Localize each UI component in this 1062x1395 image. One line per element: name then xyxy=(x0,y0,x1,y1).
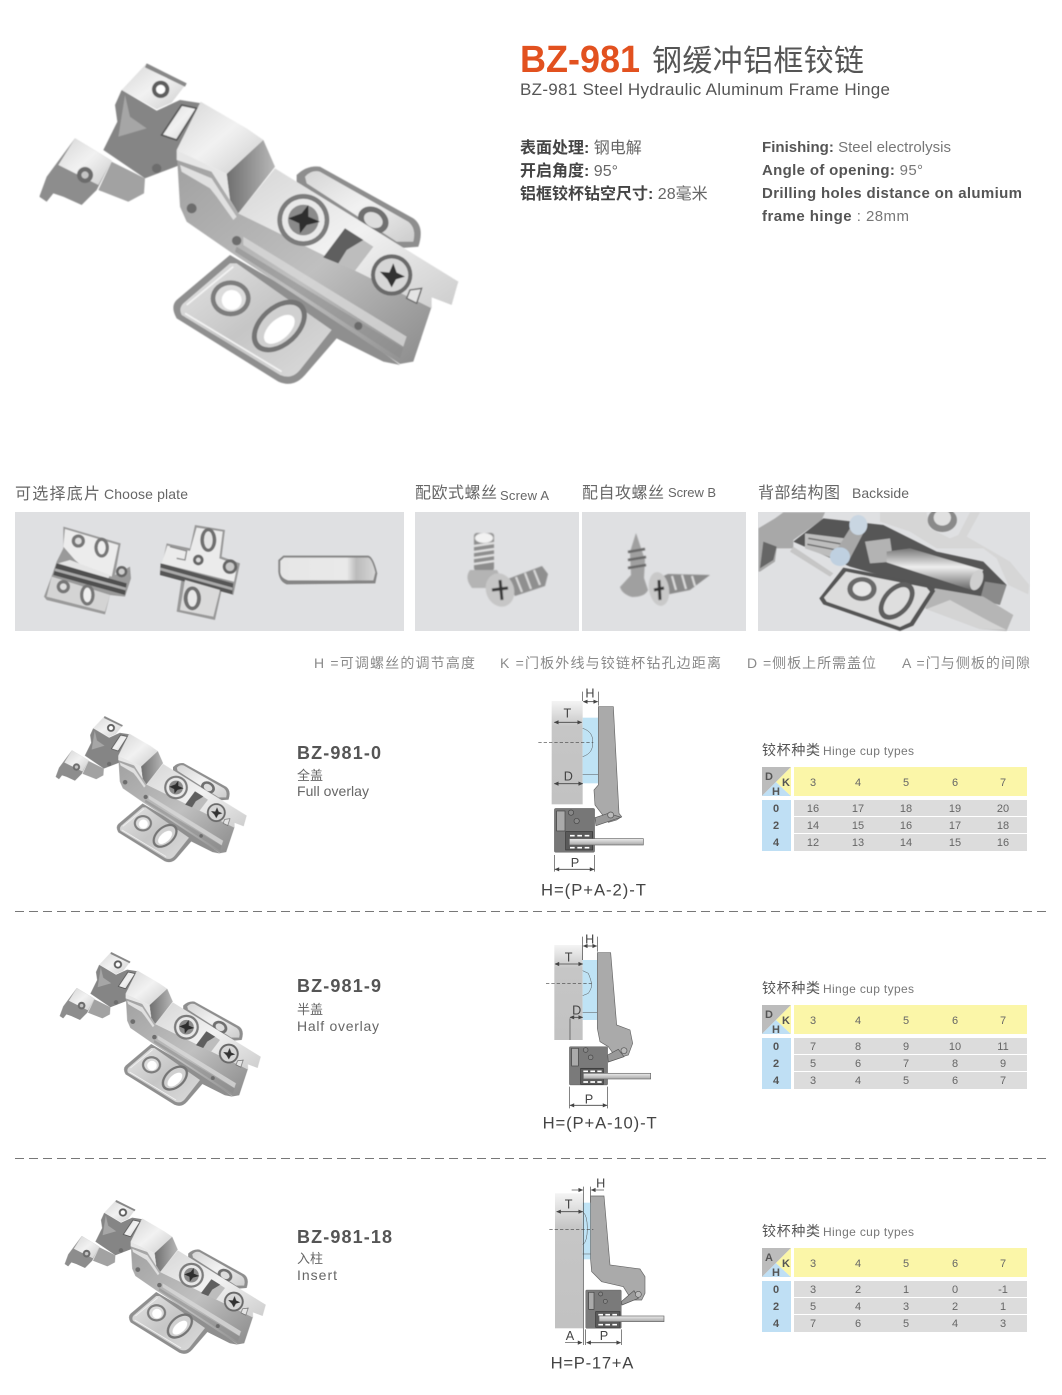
diagram: half overlay section: T xyxy=(565,950,573,964)
label: BZ-981-9: 半盖 xyxy=(297,1002,323,1017)
hinge cup table 0: 17 xyxy=(949,820,961,832)
hinge cup table 18: H xyxy=(772,1267,780,1279)
hinge cup table 9: 4 xyxy=(773,1075,780,1087)
hinge cup table 0: 14 xyxy=(807,820,819,832)
hinge cup table 9: 4 xyxy=(855,1075,861,1087)
diagram: half overlay section xyxy=(543,932,657,1133)
hinge cup table 0: Hinge cup types xyxy=(823,744,914,758)
hinge cup table 9: 6 xyxy=(952,1015,958,1027)
hinge cup table 0: 12 xyxy=(807,837,819,849)
dimension legend: A =门与侧板的间隙 xyxy=(902,655,1030,671)
hinge cup table 9: 5 xyxy=(810,1058,816,1070)
chinese specifications xyxy=(520,139,708,203)
hinge cup table 0: 3 xyxy=(810,777,816,789)
hinge cup table 0: 16 xyxy=(900,820,912,832)
row: BZ-981-9 xyxy=(60,932,1027,1133)
hinge cup table 9: 6 xyxy=(855,1058,861,1070)
diagram: half overlay section: D xyxy=(572,1003,581,1017)
hinge cup table 0: 7 xyxy=(1000,777,1006,789)
hinge cup table 18 xyxy=(762,1223,1027,1332)
hinge cup table 9: 9 xyxy=(1000,1058,1006,1070)
diagram: half overlay section: H xyxy=(585,932,594,946)
hinge cup table 18: 4 xyxy=(855,1301,861,1313)
hinge cup table 18: 1 xyxy=(1000,1301,1006,1313)
hinge cup table 0: 17 xyxy=(852,803,864,815)
diagram: full overlay section: P xyxy=(571,856,579,870)
section headings: Screw A xyxy=(500,488,549,503)
hinge cup table 18: 3 xyxy=(903,1301,909,1313)
english title: BZ-981 Steel Hydraulic Aluminum Frame Hinge xyxy=(520,80,890,99)
icon: cover cap xyxy=(278,556,377,584)
diagram: insert section: P xyxy=(600,1329,608,1343)
hinge cup table 9: 7 xyxy=(903,1058,909,1070)
hinge cup table 18: 6 xyxy=(855,1318,861,1330)
hinge cup table 0: 5 xyxy=(903,777,909,789)
hinge cup table 0: K xyxy=(782,777,790,789)
english specifications: frame hinge : 28mm xyxy=(762,208,909,225)
icon: hinge insert xyxy=(65,1200,266,1354)
dimension legend xyxy=(314,655,1030,671)
hinge cup table 18: 4 xyxy=(855,1258,861,1270)
hinge cup table 9: 10 xyxy=(949,1041,961,1053)
hinge cup table 18: 3 xyxy=(810,1284,816,1296)
hinge cup table 18: 7 xyxy=(810,1318,816,1330)
diagram: insert section xyxy=(549,1176,664,1372)
hinge cup table 9: 6 xyxy=(952,1075,958,1087)
hinge cup table 18: 铰杯种类 xyxy=(762,1223,820,1239)
hinge cup table 9: 铰杯种类 xyxy=(762,980,820,996)
hinge cup table 9: 4 xyxy=(855,1015,861,1027)
hinge cup table 0: 14 xyxy=(900,837,912,849)
label: BZ-981-9: Half overlay xyxy=(297,1018,379,1034)
hinge cup table 9: 7 xyxy=(1000,1015,1006,1027)
diagram: insert section: H=P-17+A xyxy=(551,1353,634,1372)
label: BZ-981-0 xyxy=(297,743,381,799)
hinge cup table 0: D xyxy=(765,771,773,783)
hinge cup table 9: 8 xyxy=(855,1041,861,1053)
hinge cup table 0: 15 xyxy=(852,820,864,832)
icon: hinge half overlay xyxy=(60,952,261,1106)
hinge cup table 0: 16 xyxy=(807,803,819,815)
hinge cup table 0: 6 xyxy=(952,777,958,789)
hinge cup table 0: 铰杯种类 xyxy=(762,742,820,758)
hinge cup table 9: Hinge cup types xyxy=(823,982,914,996)
row: BZ-981-0 xyxy=(56,686,1027,900)
row: BZ-981-18 xyxy=(65,1176,1027,1372)
hinge cup table 9: 8 xyxy=(952,1058,958,1070)
section headings: Screw B xyxy=(668,485,716,500)
section headings: Backside xyxy=(852,485,909,501)
diagram: full overlay section xyxy=(538,686,646,900)
hinge cup table 9: 7 xyxy=(1000,1075,1006,1087)
panel: screw A xyxy=(415,512,579,631)
chinese specifications: 开启角度: 95° xyxy=(520,161,618,180)
hinge cup table 18: 2 xyxy=(952,1301,958,1313)
hinge cup table 9 xyxy=(762,980,1027,1089)
chinese title: 钢缓冲铝框铰链 xyxy=(652,45,864,78)
section headings: 可选择底片 xyxy=(15,485,100,503)
hinge cup table 18: 5 xyxy=(903,1318,909,1330)
icon: plate one xyxy=(44,527,131,614)
section headings: Choose plate xyxy=(104,486,188,502)
section headings: 配欧式螺丝 xyxy=(415,484,497,502)
label: BZ-981-18 xyxy=(297,1227,392,1283)
hinge cup table 0: 18 xyxy=(900,803,912,815)
hinge cup table 0 xyxy=(762,742,1027,851)
main hinge product photo xyxy=(39,63,458,384)
diagram: full overlay section: H xyxy=(585,686,595,700)
hinge cup table 0: 4 xyxy=(855,777,861,789)
label: BZ-981-18: 入柱 xyxy=(297,1251,323,1266)
model number: BZ-981 xyxy=(520,39,640,81)
icon: hinge backside xyxy=(758,508,1029,631)
hinge cup table 0: 16 xyxy=(997,837,1009,849)
hinge cup table 18: Hinge cup types xyxy=(823,1225,914,1239)
diagram: half overlay section: H=(P+A-10)-T xyxy=(543,1114,657,1133)
hinge cup table 18: 2 xyxy=(855,1284,861,1296)
english specifications xyxy=(762,139,1022,225)
english specifications: Angle of opening: 95° xyxy=(762,162,923,179)
hinge cup table 0: 2 xyxy=(773,820,779,832)
diagram: insert section: A xyxy=(566,1329,575,1343)
hinge cup table 18: 4 xyxy=(952,1318,958,1330)
hinge cup table 0: 15 xyxy=(949,837,961,849)
hinge cup table 18: 1 xyxy=(903,1284,909,1296)
hinge cup table 9: H xyxy=(772,1024,780,1036)
hinge cup table 0: H xyxy=(772,786,780,798)
chinese specifications: 铝框铰杯钻空尺寸: 28毫米 xyxy=(520,184,708,203)
title block xyxy=(520,39,890,99)
hinge cup table 18: 7 xyxy=(1000,1258,1006,1270)
hinge cup table 9: K xyxy=(782,1015,790,1027)
label: BZ-981-9 xyxy=(297,976,381,1034)
section headings: 配自攻螺丝 xyxy=(582,484,664,502)
label: BZ-981-18: BZ-981-18 xyxy=(297,1227,392,1247)
hinge cup table 9: 5 xyxy=(903,1075,909,1087)
hinge cup table 9: 11 xyxy=(997,1041,1009,1053)
hinge cup table 0: 18 xyxy=(997,820,1009,832)
hinge cup table 18: 0 xyxy=(952,1284,958,1296)
diagram: half overlay section: P xyxy=(585,1092,593,1106)
hinge cup table 9: D xyxy=(765,1009,773,1021)
hinge cup table 9: 3 xyxy=(810,1015,816,1027)
english specifications: Finishing: Steel electrolysis xyxy=(762,139,951,156)
dimension legend: D =侧板上所需盖位 xyxy=(747,655,876,671)
hinge cup table 18: 6 xyxy=(952,1258,958,1270)
diagram: full overlay section: D xyxy=(564,769,573,783)
hinge cup table 0: 13 xyxy=(852,837,864,849)
label: BZ-981-0: Full overlay xyxy=(297,783,369,799)
hinge cup table 0: 0 xyxy=(773,803,779,815)
panel: screw B xyxy=(582,512,746,631)
label: BZ-981-0: 全盖 xyxy=(297,768,323,783)
dimension legend: H =可调螺丝的调节高度 xyxy=(314,655,475,671)
hinge cup table 9: 0 xyxy=(773,1041,779,1053)
dimension legend: K =门板外线与铰链杯钻孔边距离 xyxy=(500,655,721,671)
label: BZ-981-0: BZ-981-0 xyxy=(297,743,381,763)
icon: hinge full overlay xyxy=(56,716,247,862)
diagram: insert section: T xyxy=(565,1198,573,1212)
hinge cup table 18: 3 xyxy=(1000,1318,1006,1330)
diagram: full overlay section: T xyxy=(563,706,571,720)
label: BZ-981-18: Insert xyxy=(297,1267,337,1283)
chinese specifications: 表面处理: 钢电解 xyxy=(520,139,642,157)
hinge cup table 18: A xyxy=(765,1252,773,1264)
hinge cup table 18: K xyxy=(782,1258,790,1270)
hinge cup table 0: 4 xyxy=(773,837,780,849)
hinge cup table 0: 19 xyxy=(949,803,961,815)
icon: screw B xyxy=(620,533,710,607)
hinge cup table 9: 5 xyxy=(903,1015,909,1027)
hinge cup table 18: 5 xyxy=(903,1258,909,1270)
icon: screw A xyxy=(467,533,548,611)
section headings: 背部结构图 xyxy=(758,484,840,502)
section headings xyxy=(15,484,909,503)
hinge cup table 18: 3 xyxy=(810,1258,816,1270)
hinge cup table 9: 7 xyxy=(810,1041,816,1053)
hinge cup table 18: 0 xyxy=(773,1284,779,1296)
hinge cup table 9: 2 xyxy=(773,1058,779,1070)
label: BZ-981-9: BZ-981-9 xyxy=(297,976,381,996)
hinge cup table 18: -1 xyxy=(998,1284,1008,1296)
panel: backside xyxy=(758,508,1030,631)
diagram: insert section: H xyxy=(596,1176,605,1190)
diagram: full overlay section: H=(P+A-2)-T xyxy=(541,881,646,900)
icon: plate two xyxy=(160,525,240,620)
hinge cup table 18: 4 xyxy=(773,1318,780,1330)
hinge cup table 18: 2 xyxy=(773,1301,779,1313)
panel: base plates xyxy=(15,512,404,631)
hinge cup table 9: 9 xyxy=(903,1041,909,1053)
hinge cup table 9: 3 xyxy=(810,1075,816,1087)
hinge cup table 0: 20 xyxy=(997,803,1009,815)
english specifications: Drilling holes distance on alumium xyxy=(762,185,1022,202)
hinge cup table 18: 5 xyxy=(810,1301,816,1313)
